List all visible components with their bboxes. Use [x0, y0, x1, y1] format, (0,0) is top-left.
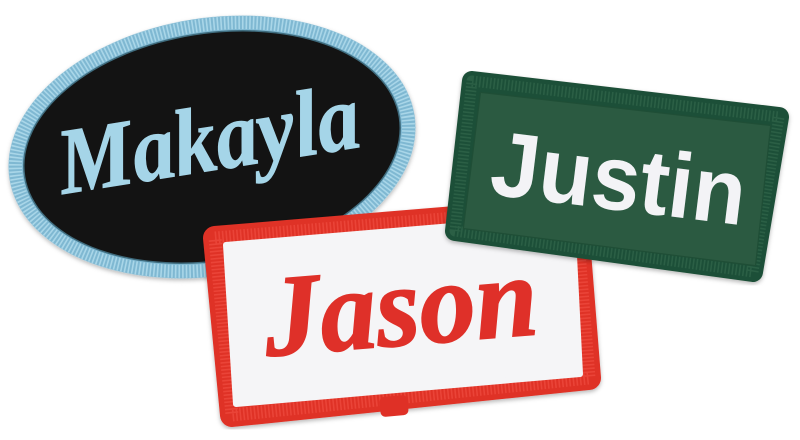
- name text: Justin: Justin: [486, 113, 752, 245]
- name text: Jason: Jason: [258, 232, 542, 382]
- patch: Justin: [455, 81, 779, 272]
- stitched tab: [379, 395, 409, 417]
- patch: Jason: [215, 208, 589, 417]
- name text: Makayla: Makayla: [48, 64, 367, 215]
